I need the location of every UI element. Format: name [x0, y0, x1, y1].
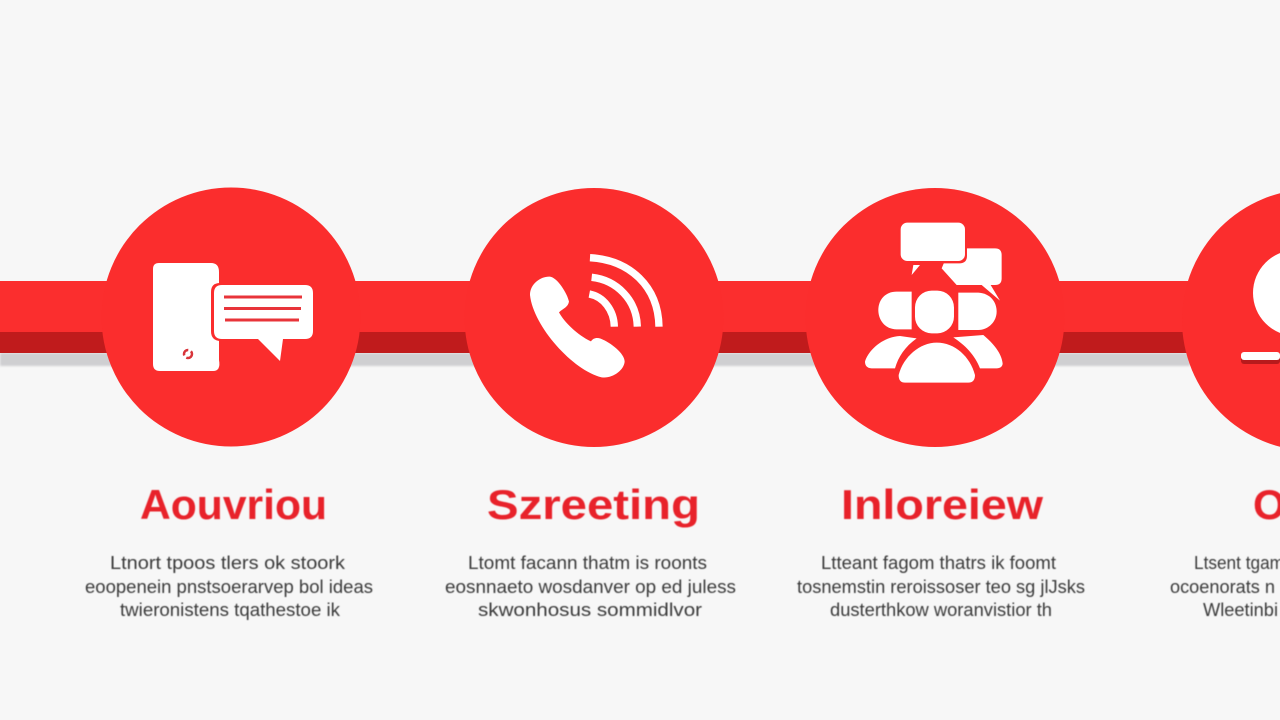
description: step 4: Wleetinbi — [1203, 600, 1278, 620]
step 4 circle and icon — [1182, 189, 1280, 451]
step 2 circle and icon — [464, 188, 724, 447]
description: step 2: Ltomt facann thatm is roonts — [468, 553, 707, 573]
description: step 3 — [797, 553, 1085, 620]
icon: phone with message bubble — [153, 263, 316, 371]
icon: telephone handset with signal waves — [530, 258, 659, 378]
description: step 3: dusterthkow woranvistior th — [830, 600, 1052, 620]
description: step 4 — [1170, 553, 1280, 620]
heading: Screening: Szreeting — [487, 481, 700, 528]
step 3 circle and icon — [806, 188, 1064, 447]
step 3 text — [797, 481, 1085, 620]
icon: group of people with speech bubbles — [865, 221, 1003, 383]
description: step 1: eoopenein pnstsoerarvep bol ideas — [85, 577, 373, 597]
description: step 2 — [445, 553, 736, 620]
description: step 3: Ltteant fagom thatrs ik foomt — [821, 553, 1056, 573]
heading: Interview: Inloreiew — [841, 481, 1043, 528]
timeline bar — [0, 281, 1190, 366]
description: step 2: skwonhosus sommidlvor — [478, 600, 702, 620]
description: step 1: Ltnort tpoos tlers ok stoork — [110, 553, 346, 573]
step 4 text — [1170, 481, 1280, 620]
description: step 1 — [85, 553, 373, 620]
icon: partial head and base line — [1241, 250, 1280, 364]
step 1 text — [85, 481, 373, 620]
description: step 1: twieronistens tqathestoe ik — [120, 600, 341, 620]
step 2 text — [445, 481, 736, 620]
heading: Aouvriou: Aouvriou — [140, 481, 327, 528]
step 1 circle and icon — [102, 188, 360, 446]
description: step 3: tosnemstin reroissoser teo sg jlJsks — [797, 577, 1085, 597]
description: step 4: ocoenorats n — [1170, 577, 1275, 597]
description: step 2: eosnnaeto wosdanver op ed juless — [445, 577, 736, 597]
